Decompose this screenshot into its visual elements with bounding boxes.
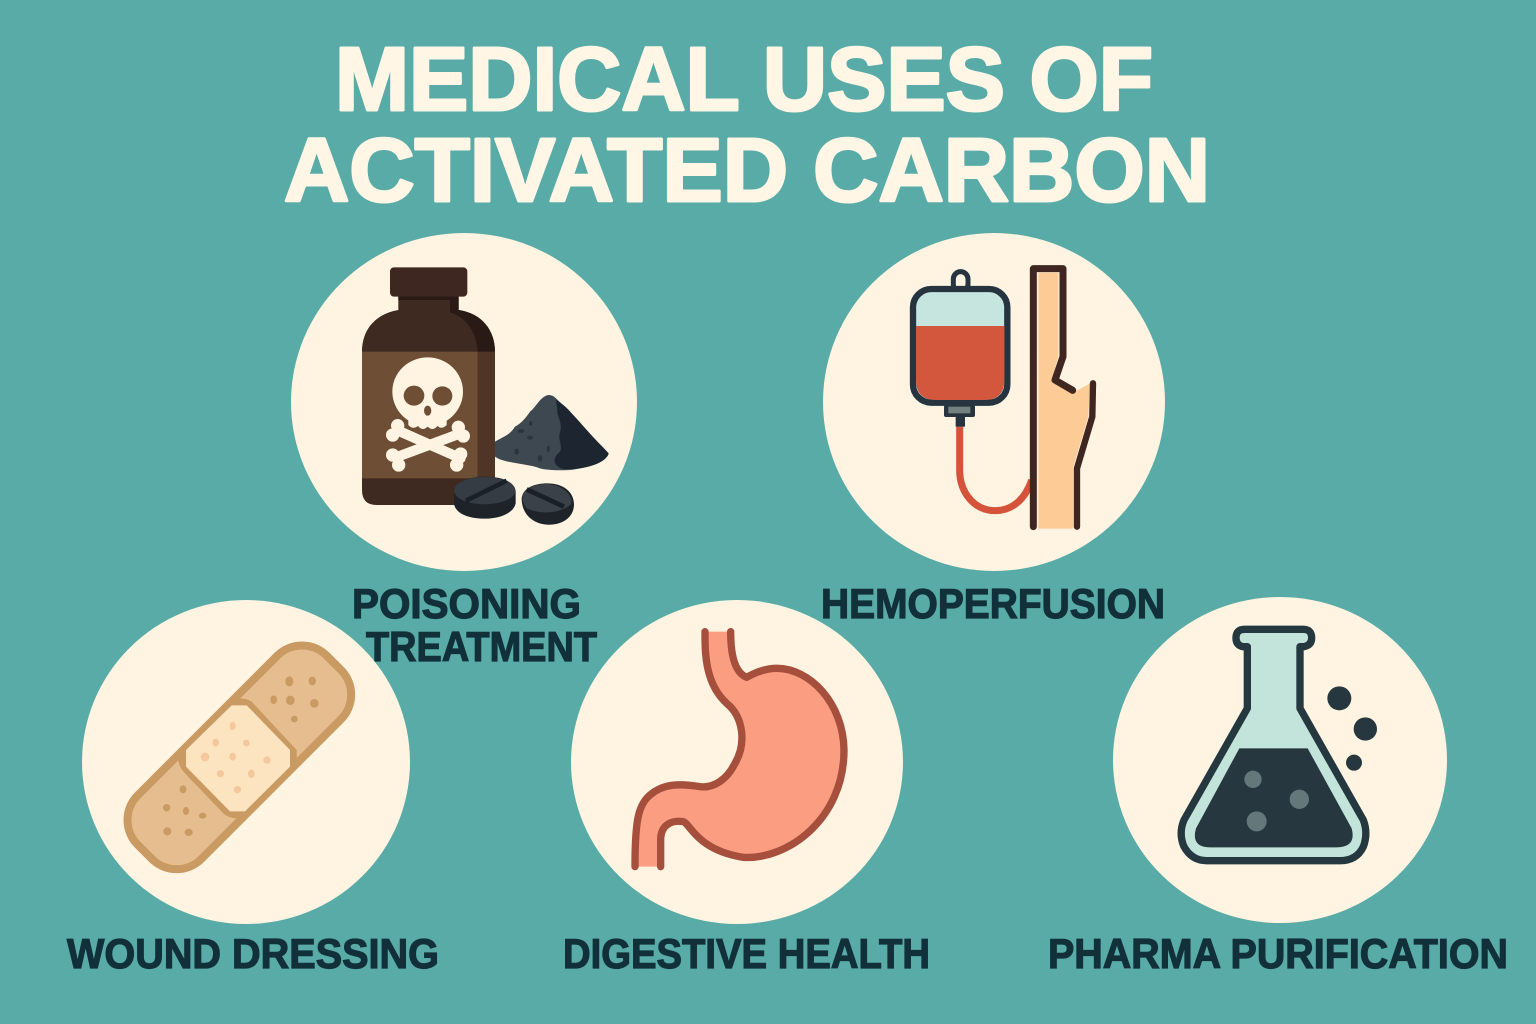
skull and crossbones <box>386 357 470 472</box>
panel: digestive health <box>563 600 930 977</box>
bandage dots <box>163 676 319 836</box>
panel: pharma purification <box>1048 597 1508 977</box>
label: pharma purification: PHARMA PURIFICATION <box>1048 930 1508 977</box>
panel: wound dressing <box>67 600 439 977</box>
label: poisoning treatment: TREATMENT <box>366 623 597 670</box>
title <box>284 30 1210 221</box>
circle background <box>823 233 1165 571</box>
carbon liquid <box>1195 748 1353 847</box>
circle background <box>82 600 410 924</box>
charcoal powder pile <box>495 395 609 470</box>
label: poisoning treatment: POISONING <box>352 580 581 627</box>
label: wound dressing: WOUND DRESSING <box>67 930 439 977</box>
icon: poison bottle, charcoal powder and tablets <box>362 267 609 525</box>
icon: blood bag and arm <box>913 269 1093 529</box>
title: ACTIVATED CARBON <box>284 121 1210 221</box>
arm <box>1033 269 1093 529</box>
carbon bubbles <box>1327 686 1377 771</box>
circle background <box>571 600 903 924</box>
charcoal tablet left <box>454 477 516 519</box>
label: hemoperfusion: HEMOPERFUSION <box>821 580 1165 627</box>
panel: hemoperfusion <box>821 233 1165 627</box>
circle background <box>1113 597 1447 923</box>
icon: adhesive bandage <box>113 631 366 884</box>
label: digestive health: DIGESTIVE HEALTH <box>563 930 930 977</box>
title: MEDICAL USES OF <box>335 30 1153 130</box>
charcoal tablet right <box>522 483 574 525</box>
blood bag <box>913 272 1007 427</box>
label: poisoning treatment <box>352 580 597 670</box>
blood tube <box>960 427 1032 511</box>
icon: stomach <box>635 632 844 867</box>
icon: flask with carbon <box>1181 629 1377 861</box>
circle background <box>291 233 637 571</box>
panel: poisoning treatment <box>291 233 637 670</box>
